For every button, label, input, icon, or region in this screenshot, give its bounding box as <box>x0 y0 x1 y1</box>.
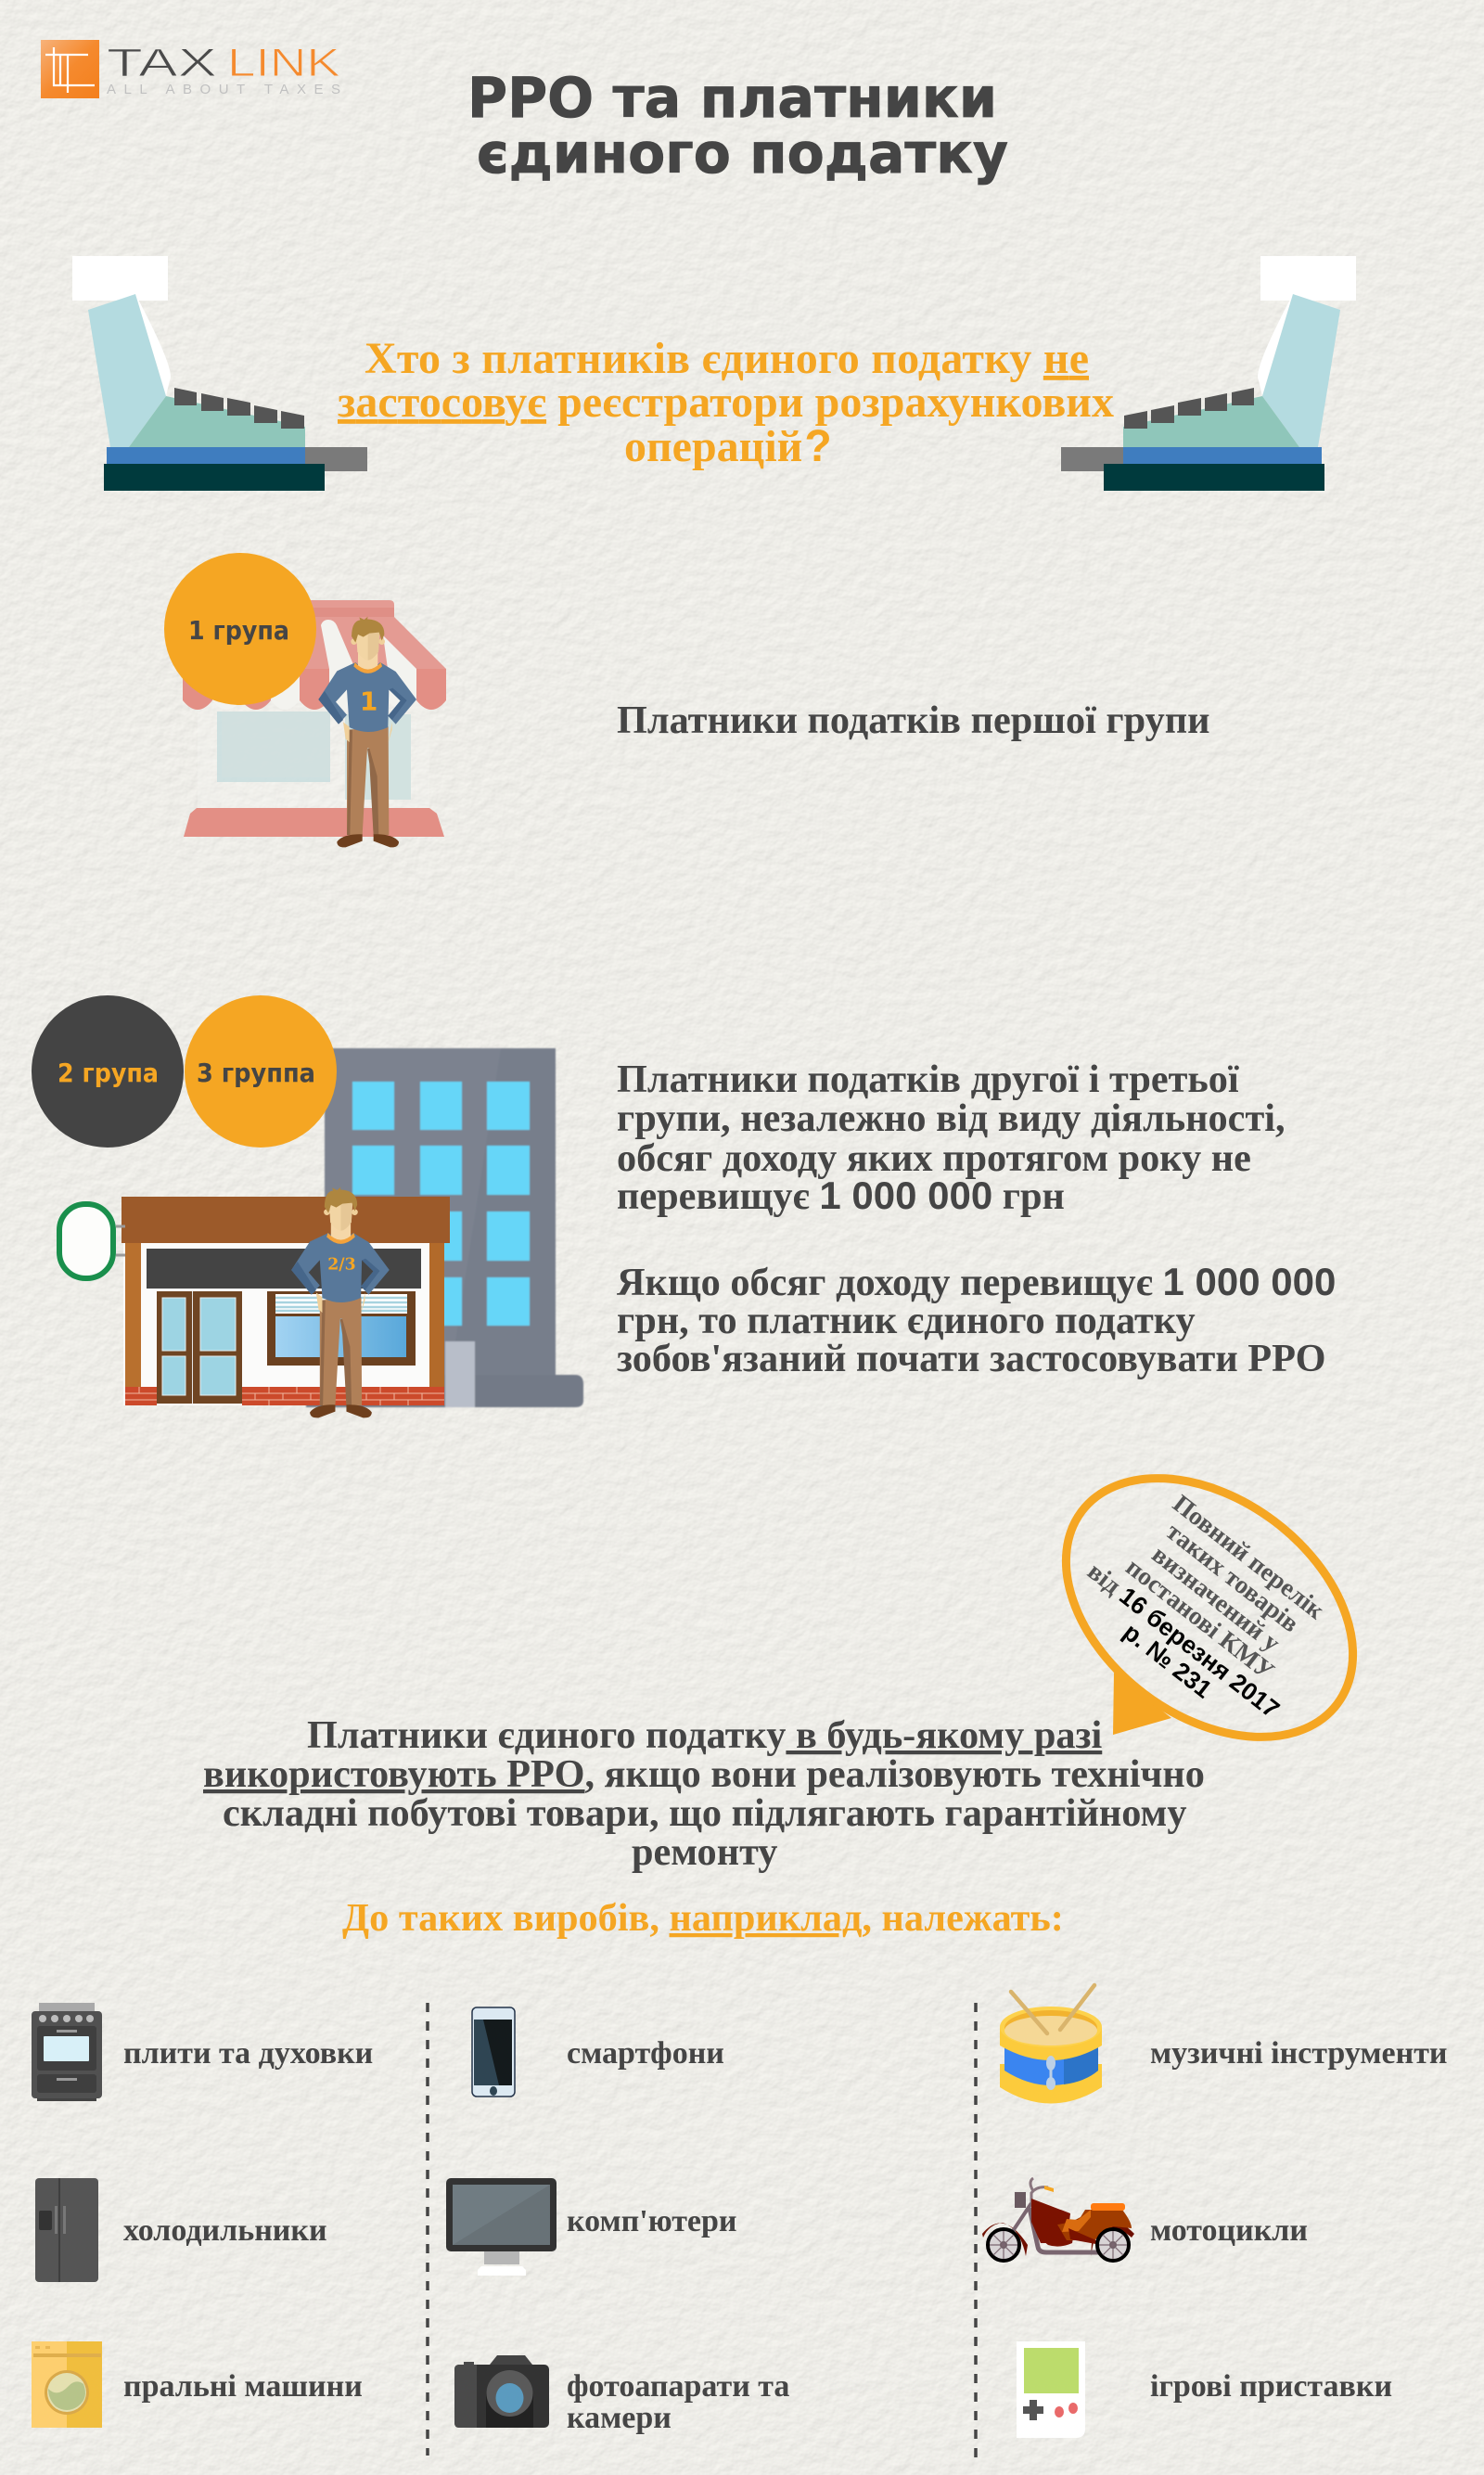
subheading: examples: До таких виробів, наприклад, належать: <box>342 1896 1064 1940</box>
text: mandatory use paragraph: складні побутові товари, що підлягають гарантійному <box>223 1791 1187 1835</box>
badge: 2 група: 2 група <box>58 1058 159 1088</box>
divider right <box>974 2003 978 2458</box>
callout: КМУ resolution: постанові КМУ <box>1120 1552 1280 1686</box>
text: groups 2 and 3 conditions: групи, незалежно від виду діяльності, <box>617 1096 1286 1140</box>
callout: КМУ resolution: від 16 березня 2017 <box>1082 1557 1286 1724</box>
logo: TaxLink: TAX <box>107 41 217 85</box>
title <box>467 66 1008 186</box>
item: motorcycle <box>982 2178 1134 2261</box>
item: game console <box>1017 2341 1085 2438</box>
label: computer: комп'ютери <box>567 2204 737 2238</box>
badge: 3 группа: 3 группа <box>197 1058 315 1088</box>
title: єдиного податку <box>477 122 1008 186</box>
text: groups 2 and 3 conditions: грн, то платник єдиного податку <box>617 1299 1196 1342</box>
question heading: застосовує реєстратори розрахункових <box>338 378 1114 427</box>
label: game console: ігрові приставки <box>1150 2369 1392 2404</box>
illustration: shop groups 2 and 3 <box>59 1197 450 1405</box>
badge: 3 группа <box>185 995 337 1148</box>
label: drum: музичні інструменти <box>1150 2036 1448 2071</box>
callout: КМУ resolution: таких товарів <box>1161 1517 1305 1637</box>
figure: man groups 2 and 3: 2/3 <box>327 1255 356 1274</box>
item: camera <box>454 2355 549 2428</box>
label: camera <box>567 2369 789 2435</box>
logo: TaxLink <box>41 40 340 98</box>
label: stove: плити та духовки <box>123 2036 373 2071</box>
icon: cash register left <box>72 256 367 491</box>
badge: 2 група <box>32 995 184 1148</box>
label: motorcycle: мотоцикли <box>1150 2213 1308 2248</box>
badge: 1 група: 1 група <box>188 615 289 646</box>
question heading: операцій? <box>624 422 832 471</box>
text: mandatory use paragraph <box>203 1713 1205 1874</box>
item: stove <box>32 2003 102 2101</box>
text: mandatory use paragraph: ремонту <box>632 1830 777 1874</box>
label: camera: фотоапарати та <box>567 2369 789 2404</box>
text: groups 2 and 3 conditions <box>617 1058 1336 1380</box>
badge: 1 група <box>164 553 316 705</box>
question heading: Хто з платників єдиного податку не <box>365 334 1089 383</box>
label: smartphone: смартфони <box>567 2036 724 2071</box>
callout: КМУ resolution: Повний перелік <box>1168 1489 1330 1624</box>
callout: КМУ resolution <box>1017 1425 1402 1790</box>
item: drum <box>1000 1985 1102 2104</box>
item: computer <box>446 2178 556 2276</box>
figure: man groups 2 and 3 <box>291 1187 390 1417</box>
text: mandatory use paragraph: Платники єдиного податку в будь-якому разі <box>307 1713 1103 1757</box>
text: groups 2 and 3 conditions: Якщо обсяг доходу перевищує 1 000 000 <box>617 1260 1336 1304</box>
label: fridge: холодильники <box>123 2213 327 2248</box>
label: camera: камери <box>567 2401 672 2435</box>
logo: TaxLink: ALL ABOUT TAXES <box>107 82 340 97</box>
callout: КМУ resolution: р. № 231 <box>1119 1618 1217 1703</box>
item: fridge <box>35 2178 98 2282</box>
text: groups 2 and 3 conditions: зобов'язаний почати застосовувати РРО <box>617 1337 1326 1380</box>
text: groups 2 and 3 conditions: обсяг доходу яких протягом року не <box>617 1136 1251 1180</box>
text: mandatory use paragraph: використовують РРО, якщо вони реалізовують технічно <box>203 1752 1205 1796</box>
illustration: office building <box>306 1048 583 1407</box>
divider left <box>426 2003 429 2456</box>
figure: man group 1: 1 <box>360 686 377 717</box>
text: groups 2 and 3 conditions: перевищує 1 000 000 грн <box>617 1173 1065 1218</box>
item: smartphone <box>472 2007 515 2097</box>
text: groups 2 and 3 conditions: Платники податків другої і третьої <box>617 1058 1239 1101</box>
text: first group: Платники податків першої групи <box>617 699 1209 742</box>
label: washing machine: пральні машини <box>123 2369 363 2404</box>
figure: man group 1 <box>318 617 416 847</box>
callout: КМУ resolution: визначений у <box>1147 1539 1286 1657</box>
item: washing machine <box>32 2341 102 2428</box>
illustration: shop group 1 <box>183 600 446 837</box>
logo: TaxLink: LINK <box>227 41 340 85</box>
title: РРО та платники <box>467 66 997 131</box>
icon: cash register right <box>1061 256 1356 491</box>
question heading <box>338 334 1114 471</box>
